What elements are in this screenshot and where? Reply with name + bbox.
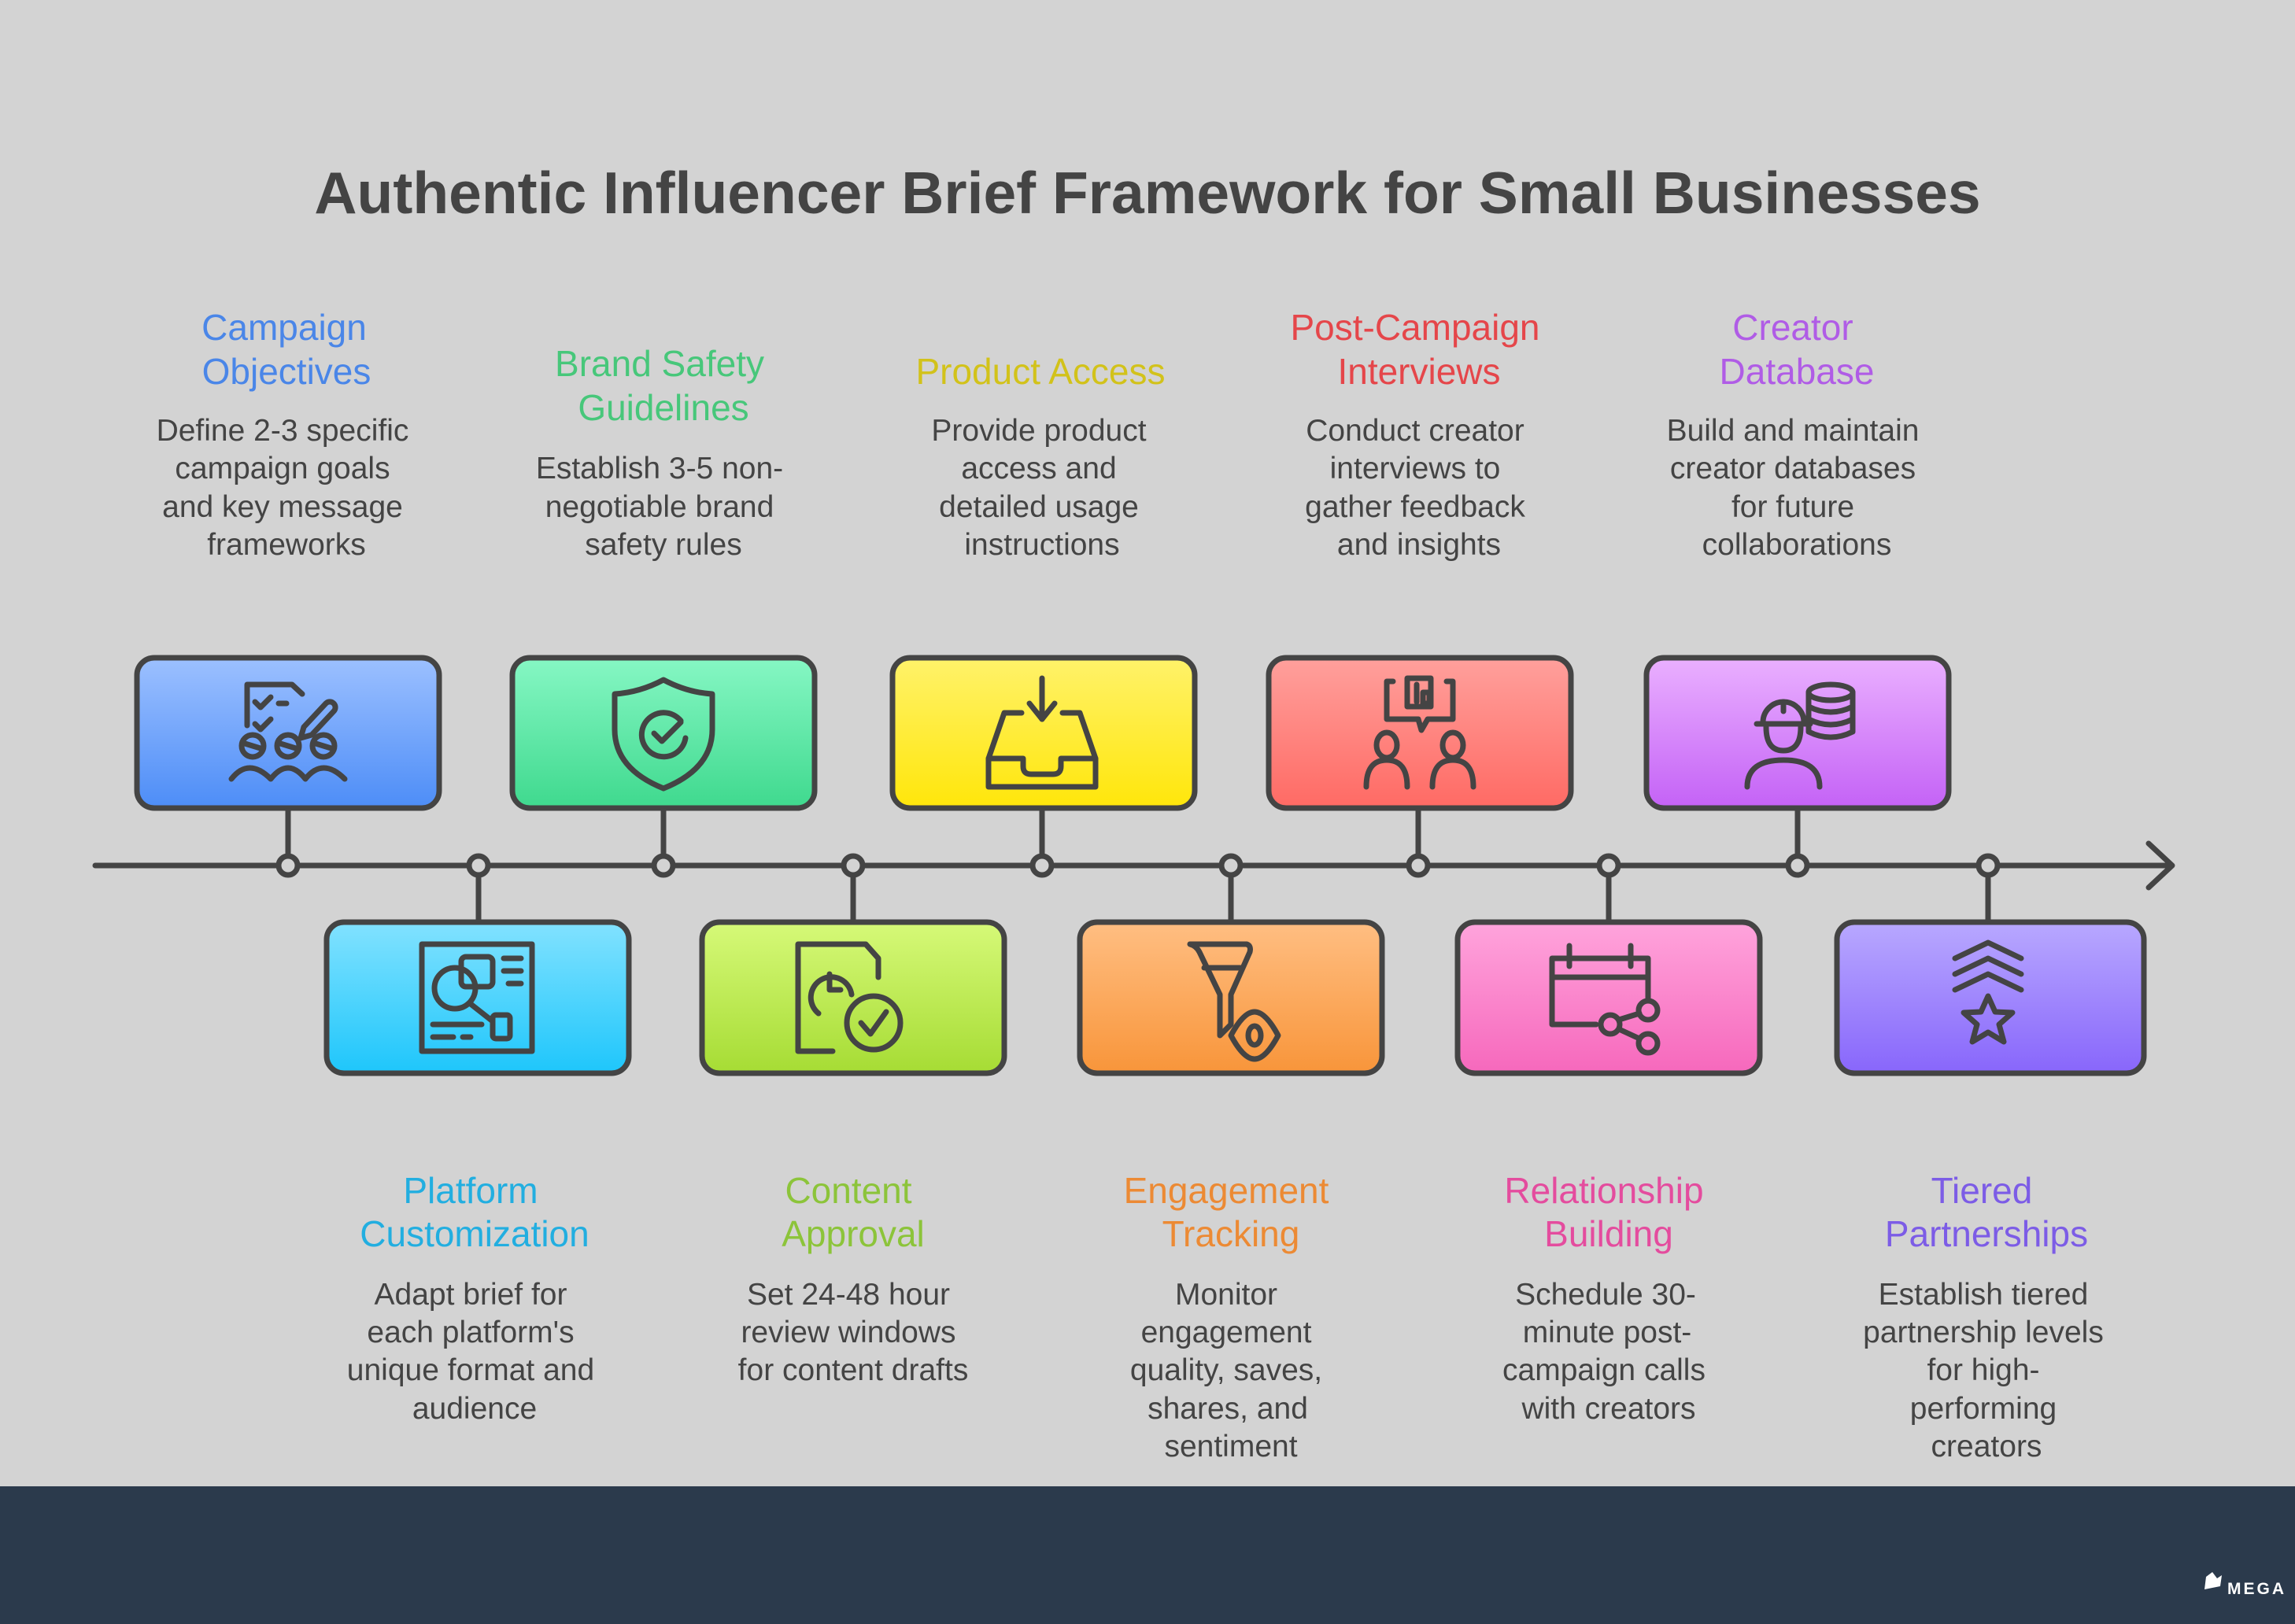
panel: Post-Campaign Interviews [1269, 307, 1571, 808]
icon box: Tiered Partnerships [1837, 922, 2144, 1073]
heading: Brand Safety Guidelines: Guidelines [578, 387, 749, 428]
heading: Engagement Tracking: Tracking [1162, 1213, 1299, 1254]
text: Content Approval description: for content drafts [738, 1353, 968, 1387]
heading: Engagement Tracking: Engagement [1124, 1170, 1329, 1211]
text: Campaign Objectives description: campaign goals [175, 452, 390, 485]
text: Relationship Building description: campaign calls [1502, 1353, 1706, 1387]
text: Product Access description: access and [961, 452, 1117, 485]
panel: Creator Database [1646, 307, 1949, 808]
icon box: Engagement Tracking [1080, 922, 1382, 1073]
heading: Creator Database: Creator [1732, 307, 1853, 348]
text: Engagement Tracking description: shares, and [1148, 1392, 1308, 1426]
text: Campaign Objectives description: Define 2-3 specific [157, 414, 408, 448]
text: Tiered Partnerships description: performing [1910, 1392, 2057, 1426]
icon box: Platform Customization [327, 922, 629, 1073]
text: Interviews description: interviews to [1330, 452, 1500, 485]
panel: Tiered Partnerships [1837, 922, 2144, 1463]
footer bar [0, 1486, 2295, 1624]
text: Platform Customization description: unique format and [347, 1353, 594, 1387]
heading: Platform Customization: Platform [403, 1170, 538, 1211]
icon box: Interviews [1269, 658, 1571, 808]
text: Creator Database description: Build and maintain [1667, 414, 1919, 448]
icon box: Brand Safety [512, 658, 815, 808]
heading: Tiered Partnerships: Tiered [1931, 1170, 2032, 1211]
text: Tiered Partnerships description: for high- [1927, 1353, 2040, 1387]
text: Tiered Partnerships description: creators [1931, 1430, 2042, 1463]
heading: Tiered Partnerships: Partnerships [1885, 1213, 2088, 1254]
panel: Engagement Tracking [1080, 922, 1382, 1463]
heading: Campaign Objectives: Campaign [201, 307, 367, 348]
text: Creator Database description: collaborations [1702, 528, 1891, 562]
text: Engagement Tracking description: sentiment [1164, 1430, 1298, 1463]
text: Campaign Objectives description: frameworks [207, 528, 366, 562]
panel: Platform Customization [327, 922, 629, 1426]
icon box: Creator Database [1646, 658, 1949, 808]
heading: Content Approval: Approval [782, 1213, 925, 1254]
text: Creator Database description: for future [1731, 490, 1854, 524]
text: Interviews description: gather feedback [1305, 490, 1525, 524]
panel: Relationship Building [1458, 922, 1760, 1426]
text: Engagement Tracking description: engagement [1141, 1316, 1312, 1349]
logo: MEGA [2204, 1572, 2286, 1598]
heading: Relationship Building: Building [1544, 1213, 1673, 1254]
icon box: Relationship Building [1458, 922, 1760, 1073]
heading: Platform Customization: Customization [360, 1213, 589, 1254]
text: Content Approval description: review windows [741, 1316, 956, 1349]
text: Engagement Tracking description: Monitor [1175, 1278, 1277, 1312]
title: Authentic Influencer Brief Framework for Small Businesses [314, 160, 1981, 226]
text: Product Access description: detailed usage [939, 490, 1139, 524]
heading: Content Approval: Content [785, 1170, 912, 1211]
heading: Brand Safety Guidelines: Brand Safety [555, 343, 764, 384]
logo: MEGA: MEGA [2227, 1580, 2286, 1598]
text: Product Access description: instructions [964, 528, 1120, 562]
panel: Content Approval [702, 922, 1004, 1387]
icon box: Campaign Objectives [137, 658, 439, 808]
panel: Product Access [893, 351, 1195, 808]
text: Content Approval description: Set 24-48 hour [747, 1278, 950, 1312]
text: Relationship Building description: with creators [1521, 1392, 1696, 1426]
text: Relationship Building description: minute post- [1523, 1316, 1691, 1349]
text: Engagement Tracking description: quality, saves, [1130, 1353, 1322, 1387]
heading: Creator Database: Database [1720, 351, 1874, 392]
heading: Relationship Building: Relationship [1504, 1170, 1704, 1211]
heading: Campaign Objectives: Objectives [202, 351, 371, 392]
timeline axis with arrow [95, 810, 2172, 921]
text: Brand Safety description: Establish 3-5 non- [536, 452, 783, 485]
text: Interviews description: Conduct creator [1306, 414, 1524, 448]
text: Brand Safety description: negotiable brand [545, 490, 774, 524]
heading: Product Access: Product Access [915, 351, 1166, 392]
text: Tiered Partnerships description: Establish tiered [1879, 1278, 2088, 1312]
heading: Post-Campaign Interviews: Post-Campaign [1290, 307, 1540, 348]
text: Platform Customization description: audience [412, 1392, 537, 1426]
text: Creator Database description: creator databases [1670, 452, 1916, 485]
icon box: Product Access [893, 658, 1195, 808]
heading: Post-Campaign Interviews: Interviews [1337, 351, 1501, 392]
panel: Brand Safety Guidelines [512, 343, 815, 808]
text: Relationship Building description: Schedule 30- [1515, 1278, 1696, 1312]
text: Brand Safety description: safety rules [585, 528, 742, 562]
text: Campaign Objectives description: and key message [162, 490, 403, 524]
text: Product Access description: Provide product [931, 414, 1147, 448]
icon box: Content Approval [702, 922, 1004, 1073]
text: Interviews description: and insights [1337, 528, 1501, 562]
text: Tiered Partnerships description: partnership levels [1863, 1316, 2104, 1349]
panel: Campaign Objectives [137, 307, 439, 808]
text: Platform Customization description: each platform's [367, 1316, 575, 1349]
text: Platform Customization description: Adapt brief for [375, 1278, 567, 1312]
